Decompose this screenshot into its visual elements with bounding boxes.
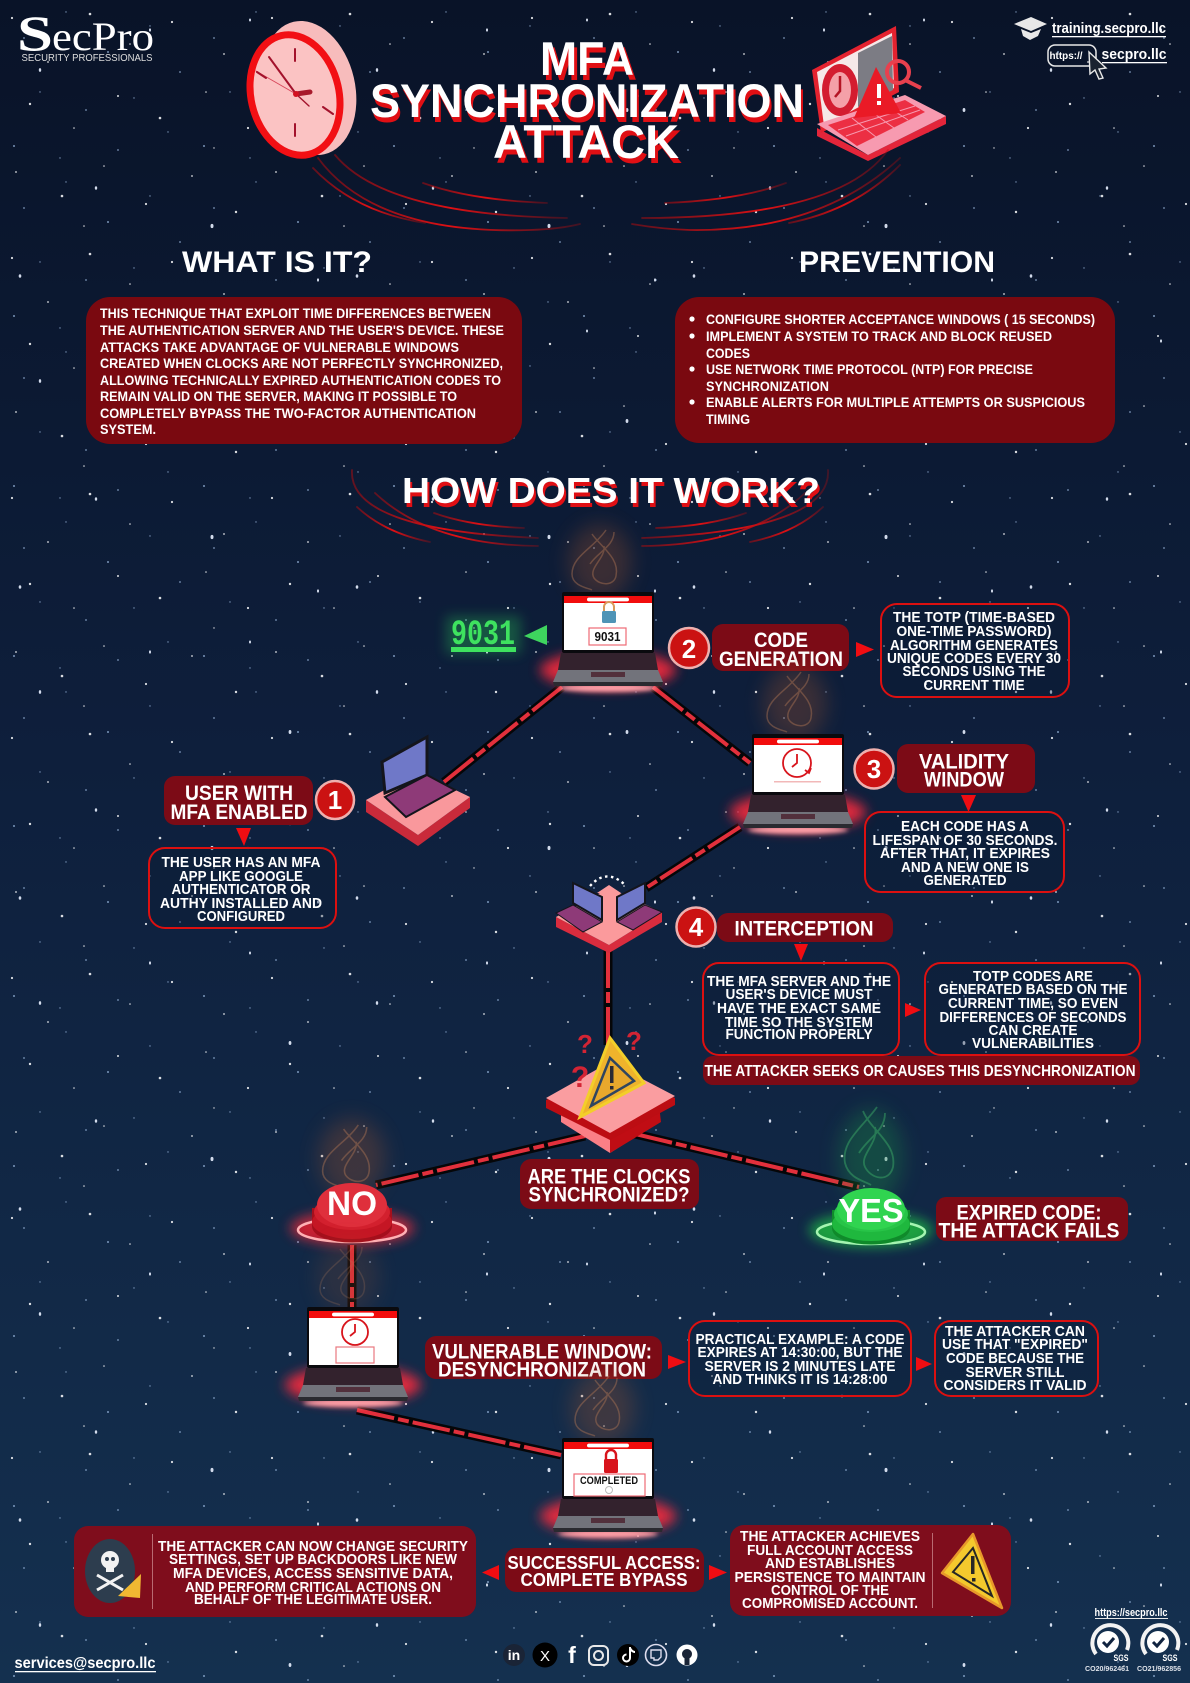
certification badges: [1085, 1607, 1181, 1673]
code box: [589, 628, 626, 645]
step 4 description: clocks: THE MFA SERVER AND THE: [707, 973, 891, 990]
training link: training.secpro.llc: [1052, 20, 1166, 37]
step 2 number: 2: [682, 634, 696, 664]
step 4 description: clocks: TIME SO THE SYSTEM: [725, 1014, 873, 1031]
decision label: SYNCHRONIZED?: [528, 1184, 690, 1206]
badge: SGS 1: CO20/962461: [1085, 1664, 1129, 1673]
step 1 number: [316, 781, 354, 819]
panel: prevention: CONFIGURE SHORTER ACCEPTANCE WINDOWS ( 15 SECONDS): [706, 312, 1095, 327]
badge: SGS 1: SGS: [1114, 1653, 1128, 1663]
arrow: [709, 1565, 727, 1580]
decorative arcs around how-it-works heading: [352, 470, 828, 546]
panel: attacker actions: AND PERFORM CRITICAL ACTIONS ON: [185, 1579, 441, 1596]
heading: what is it: WHAT IS IT?: [182, 246, 372, 279]
step 1 description: AUTHENTICATOR OR: [172, 881, 311, 898]
icon: twitch: [646, 1644, 666, 1666]
step 4 description: TOTP: CURRENT TIME, SO EVEN: [948, 995, 1118, 1012]
panel: what is it: COMPLETELY BYPASS THE TWO-FACTOR AUTHENTICATION: [100, 406, 476, 421]
successful access label: SUCCESSFUL ACCESS:: [508, 1553, 700, 1573]
laptop: code generation: [540, 524, 676, 692]
badge: SGS 2: CO21/962856: [1137, 1664, 1181, 1673]
title: SYNCHRONIZATION: [372, 79, 806, 132]
panel: what is it: THE AUTHENTICATION SERVER AND THE USER'S DEVICE. THESE: [100, 323, 504, 338]
panel: prevention: ENABLE ALERTS FOR MULTIPLE ATTEMPTS OR SUSPICIOUS: [706, 395, 1085, 410]
step 4 description: clocks: FUNCTION PROPERLY: [726, 1026, 872, 1043]
heading: how does it work: HOW DOES IT WORK?: [404, 474, 822, 515]
icon: linkedin: [503, 1644, 525, 1666]
panel: persistence: PERSISTENCE TO MAINTAIN: [734, 1569, 926, 1586]
step 4 description: clocks: USER'S DEVICE MUST: [726, 986, 872, 1003]
step 4 label: INTERCEPTION: [734, 918, 874, 940]
icon: laptop with alert: [812, 26, 946, 161]
https box: https://: [1050, 50, 1083, 62]
practical example: SERVER IS 2 MINUTES LATE: [704, 1358, 896, 1375]
icon: skull and warning: [85, 1539, 141, 1603]
attacker uses expired code: USE THAT "EXPIRED": [942, 1336, 1088, 1353]
icon: warning triangle: [942, 1534, 1002, 1608]
icon: X: [532, 1642, 558, 1668]
step 3 number: 3: [867, 754, 881, 784]
arrow: [668, 1355, 686, 1369]
heading: how does it work: HOW DOES IT WORK?: [402, 470, 820, 511]
step 3 label: WINDOW: [924, 768, 1004, 792]
social icons: [503, 1642, 698, 1668]
panel: attacker actions: [74, 1526, 476, 1617]
logo: SecPro: S: [17, 5, 53, 61]
panel: attacker actions: MFA DEVICES, ACCESS SENSITIVE DATA,: [173, 1565, 453, 1582]
step 1 label: USER WITH: [185, 782, 293, 805]
step 1 number: 1: [328, 785, 342, 815]
panel: what is it: SYSTEM.: [100, 422, 156, 437]
icon: github: [676, 1644, 698, 1666]
step 2 description: ONE-TIME PASSWORD): [896, 623, 1052, 640]
arrow: [905, 1003, 921, 1017]
step 4 description: TOTP: DIFFERENCES OF SECONDS: [940, 1009, 1126, 1026]
panel: what is it: ALLOWING TECHNICALLY EXPIRED AUTHENTICATION CODES TO: [100, 373, 501, 388]
outcome label: attack fails: [936, 1197, 1128, 1242]
icon: instagram: [589, 1646, 608, 1665]
button: YES: YES: [838, 1192, 904, 1229]
panel: persistence: AND ESTABLISHES: [765, 1555, 895, 1572]
icon: warning platform: ?: [571, 1061, 589, 1094]
vulnerable window label: DESYNCHRONIZATION: [438, 1358, 646, 1382]
arrow: [794, 944, 808, 961]
attacker uses expired code: [935, 1321, 1098, 1396]
step 4 description: TOTP: TOTP CODES ARE: [973, 968, 1093, 985]
title: MFA: [543, 37, 637, 90]
step 1 label: [164, 776, 313, 825]
outcome label: attack fails: THE ATTACK FAILS: [938, 1220, 1120, 1242]
laptop: completed: [540, 1370, 676, 1538]
completed box: [574, 1474, 645, 1496]
icon: tiktok: [617, 1644, 639, 1666]
step 3 description: AFTER THAT, IT EXPIRES: [880, 845, 1050, 862]
successful access label: [505, 1548, 704, 1592]
website link: secpro.llc: [1102, 46, 1166, 63]
outcome label: attack fails: EXPIRED CODE:: [956, 1202, 1102, 1224]
step 2 description: ALGORITHM GENERATES: [890, 637, 1058, 654]
panel: prevention: TIMING: [706, 412, 750, 427]
icon: warning platform: [546, 1026, 675, 1153]
panel: what is it: THIS TECHNIQUE THAT EXPLOIT TIME DIFFERENCES BETWEEN: [100, 306, 491, 321]
icon: graduation cap: [1014, 17, 1047, 40]
icon: user laptop on platform: [366, 737, 470, 846]
step 4 description: clocks: HAVE THE EXACT SAME: [717, 1000, 881, 1017]
button: NO: [290, 1119, 414, 1245]
step 3 number: [854, 750, 894, 788]
icon: interception platform: [556, 876, 662, 953]
icon: clock: [238, 11, 369, 165]
step 2 description: UNIQUE CODES EVERY 30: [887, 650, 1061, 667]
laptop: validity window: [730, 666, 866, 834]
practical example: PRACTICAL EXAMPLE: A CODE: [696, 1331, 904, 1348]
panel: prevention: IMPLEMENT A SYSTEM TO TRACK AND BLOCK REUSED: [706, 329, 1052, 344]
panel: prevention: USE NETWORK TIME PROTOCOL (NTP) FOR PRECISE: [706, 362, 1033, 377]
step 2 label: CODE: [754, 629, 808, 652]
attacker uses expired code: CODE BECAUSE THE: [946, 1350, 1084, 1367]
arrow: [916, 1357, 932, 1371]
step 3 label: [897, 744, 1035, 793]
badge: SGS 2: SGS: [1162, 1653, 1178, 1663]
decision label: ARE THE CLOCKS: [528, 1166, 690, 1188]
step 1 label: MFA ENABLED: [170, 801, 308, 824]
step 4 description: TOTP: CAN CREATE: [988, 1022, 1078, 1039]
title: [370, 32, 806, 173]
icon: cursor: [1089, 52, 1106, 79]
step 3 description: EACH CODE HAS A: [901, 818, 1029, 835]
step 4 number: 4: [689, 912, 704, 942]
panel: persistence: CONTROL OF THE: [771, 1582, 889, 1599]
arrow: [236, 828, 251, 846]
panel: what is it: ATTACKS TAKE ADVANTAGE OF VULNERABLE WINDOWS: [100, 340, 459, 355]
heading: prevention: PREVENTION: [799, 246, 995, 279]
panel: persistence: COMPROMISED ACCOUNT.: [742, 1595, 918, 1612]
step 1 description: APP LIKE GOOGLE: [179, 868, 303, 885]
logo: SecPro: [17, 5, 154, 64]
step 4 number: [676, 908, 716, 946]
icon: clock with arrow: [783, 749, 811, 777]
title: SYNCHRONIZATION: [370, 74, 804, 127]
icon: facebook: f: [568, 1642, 576, 1668]
practical example: [689, 1321, 911, 1396]
vulnerable window label: VULNERABLE WINDOW:: [432, 1340, 652, 1364]
icon: lock: [602, 602, 616, 623]
logo: SecPro: SECURITY PROFESSIONALS: [22, 52, 152, 64]
step 2 description: [881, 604, 1069, 697]
step 2 description: CURRENT TIME: [924, 677, 1024, 694]
step 1 description: [149, 848, 336, 928]
step 3 description: LIFESPAN OF 30 SECONDS.: [872, 832, 1058, 849]
attacker uses expired code: SERVER STILL: [966, 1364, 1064, 1381]
panel: what is it: [86, 297, 522, 444]
icon: linkedin: in: [508, 1647, 520, 1663]
icon: warning platform: ?: [577, 1029, 593, 1059]
completed box: COMPLETED: [580, 1475, 638, 1487]
step 2 description: THE TOTP (TIME-BASED: [893, 609, 1055, 626]
panel: prevention: [675, 297, 1115, 443]
step 4 description: TOTP: VULNERABILITIES: [972, 1035, 1094, 1052]
step 4 description: TOTP: [925, 963, 1140, 1055]
flow connector lines: [352, 687, 859, 1455]
panel: attacker actions: SETTINGS, SET UP BACKDOORS LIKE NEW: [169, 1551, 458, 1568]
logo: SecPro: ecPro: [52, 14, 154, 59]
certification badges: https://secpro.llc: [1094, 1607, 1168, 1619]
step 1 description: THE USER HAS AN MFA: [162, 854, 321, 871]
icon: warning platform: ?: [626, 1026, 642, 1056]
title: ATTACK: [493, 115, 679, 168]
code box: 9031: [594, 629, 620, 644]
title: MFA: [540, 32, 634, 85]
attacker uses expired code: THE ATTACKER CAN: [945, 1323, 1085, 1340]
panel: what is it: CREATED WHEN CLOCKS ARE NOT PERFECTLY SYNCHRONIZED,: [100, 356, 503, 371]
panel: prevention: CODES: [706, 346, 750, 361]
panel: attacker actions: BEHALF OF THE LEGITIMATE USER.: [194, 1591, 432, 1608]
decorative arcs under title: [313, 150, 900, 230]
attacker uses expired code: CONSIDERS IT VALID: [944, 1377, 1087, 1394]
https box: [1048, 45, 1096, 66]
arrow: green: [524, 625, 547, 645]
step 3 description: [865, 812, 1064, 892]
step 2 description: SECONDS USING THE: [902, 663, 1046, 680]
panel: persistence: [730, 1525, 1011, 1616]
links: training and website: [1014, 17, 1167, 79]
icon: clock with arrow: [342, 1319, 368, 1345]
arrow: [856, 642, 874, 657]
footer email: services@secpro.llc: [14, 1655, 156, 1672]
step 2 number: [669, 628, 709, 668]
step 2 label: [712, 624, 849, 671]
panel: attacker actions: THE ATTACKER CAN NOW CHANGE SECURITY: [158, 1538, 468, 1555]
practical example: EXPIRES AT 14:30:00, BUT THE: [698, 1344, 902, 1361]
successful access label: COMPLETE BYPASS: [520, 1570, 688, 1590]
panel: persistence: FULL ACCOUNT ACCESS: [747, 1542, 913, 1559]
practical example: AND THINKS IT IS 14:28:00: [712, 1371, 888, 1388]
step 1 description: CONFIGURED: [197, 908, 285, 925]
panel: persistence: THE ATTACKER ACHIEVES: [740, 1528, 920, 1545]
code display: 9031: 9031: [451, 615, 515, 655]
icon: X: X: [540, 1648, 550, 1665]
step 4 description: TOTP: GENERATED BASED ON THE: [938, 981, 1128, 998]
step 2 label: GENERATION: [719, 648, 843, 671]
step 3 label: VALIDITY: [919, 750, 1009, 774]
vulnerable window label: [425, 1336, 662, 1382]
decision label: [520, 1159, 699, 1209]
step 3 description: GENERATED: [924, 872, 1007, 889]
button: YES: [809, 1107, 933, 1247]
step 4 description: clocks: [703, 963, 899, 1055]
badge: SGS 1: [1085, 1625, 1129, 1673]
badge: SGS 2: [1137, 1625, 1181, 1673]
step 3 description: AND A NEW ONE IS: [901, 859, 1029, 876]
panel: prevention: SYNCHRONIZATION: [706, 379, 829, 394]
arrow: [961, 795, 976, 812]
band: attacker desynchronization: [703, 1056, 1140, 1085]
panel: what is it: REMAIN VALID ON THE SERVER, MAKING IT POSSIBLE TO: [100, 389, 457, 404]
title: ATTACK: [496, 120, 682, 173]
button: NO: NO: [327, 1185, 377, 1223]
icon: red lock: [604, 1450, 618, 1473]
step 1 description: AUTHY INSTALLED AND: [160, 895, 322, 912]
laptop: vulnerable window: [285, 1239, 421, 1407]
arrow: [482, 1565, 499, 1580]
